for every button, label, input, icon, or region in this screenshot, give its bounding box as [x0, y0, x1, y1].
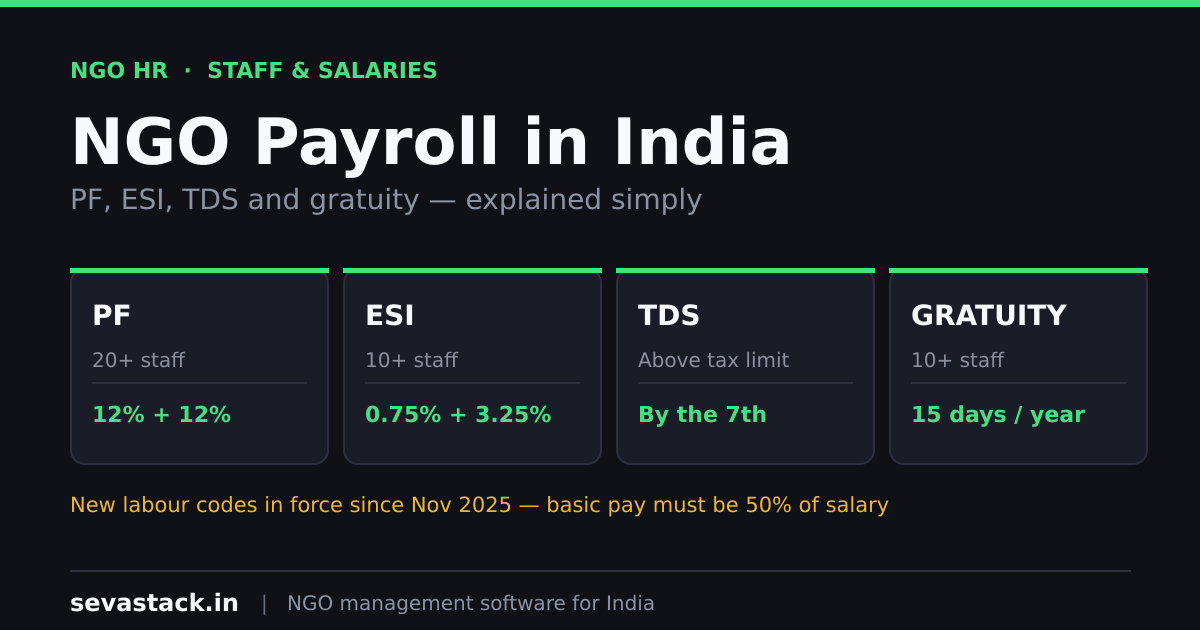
- card: ESI: [343, 268, 602, 465]
- card threshold: PF: 20+ staff: [92, 348, 185, 372]
- footer tagline: NGO management software for India: [287, 591, 655, 615]
- card threshold: TDS: Above tax limit: [638, 348, 789, 372]
- card heading: PF: PF: [92, 299, 132, 332]
- card value: TDS: By the 7th: [638, 403, 767, 428]
- notice text: New labour codes in force since Nov 2025 — basic pay must be 50% of salary: [70, 493, 889, 517]
- footer separator: |: [261, 591, 268, 615]
- card: PF: [70, 268, 329, 465]
- card threshold: ESI: 10+ staff: [365, 348, 458, 372]
- card heading: ESI: ESI: [365, 299, 415, 332]
- title: NGO Payroll in India: [70, 106, 793, 180]
- eyebrow label: NGO HR · STAFF & SALARIES: [70, 59, 438, 84]
- top accent bar: [0, 0, 1200, 7]
- card heading: Gratuity: GRATUITY: [911, 299, 1067, 332]
- card value: PF: 12% + 12%: [92, 403, 231, 428]
- card: Gratuity: [889, 268, 1148, 465]
- footer brand: sevastack.in: [70, 589, 239, 617]
- card value: ESI: 0.75% + 3.25%: [365, 403, 551, 428]
- card value: Gratuity: 15 days / year: [911, 403, 1085, 428]
- card threshold: Gratuity: 10+ staff: [911, 348, 1004, 372]
- card: TDS: [616, 268, 875, 465]
- card heading: TDS: TDS: [638, 299, 701, 332]
- subtitle: PF, ESI, TDS and gratuity — explained simply: [70, 183, 703, 216]
